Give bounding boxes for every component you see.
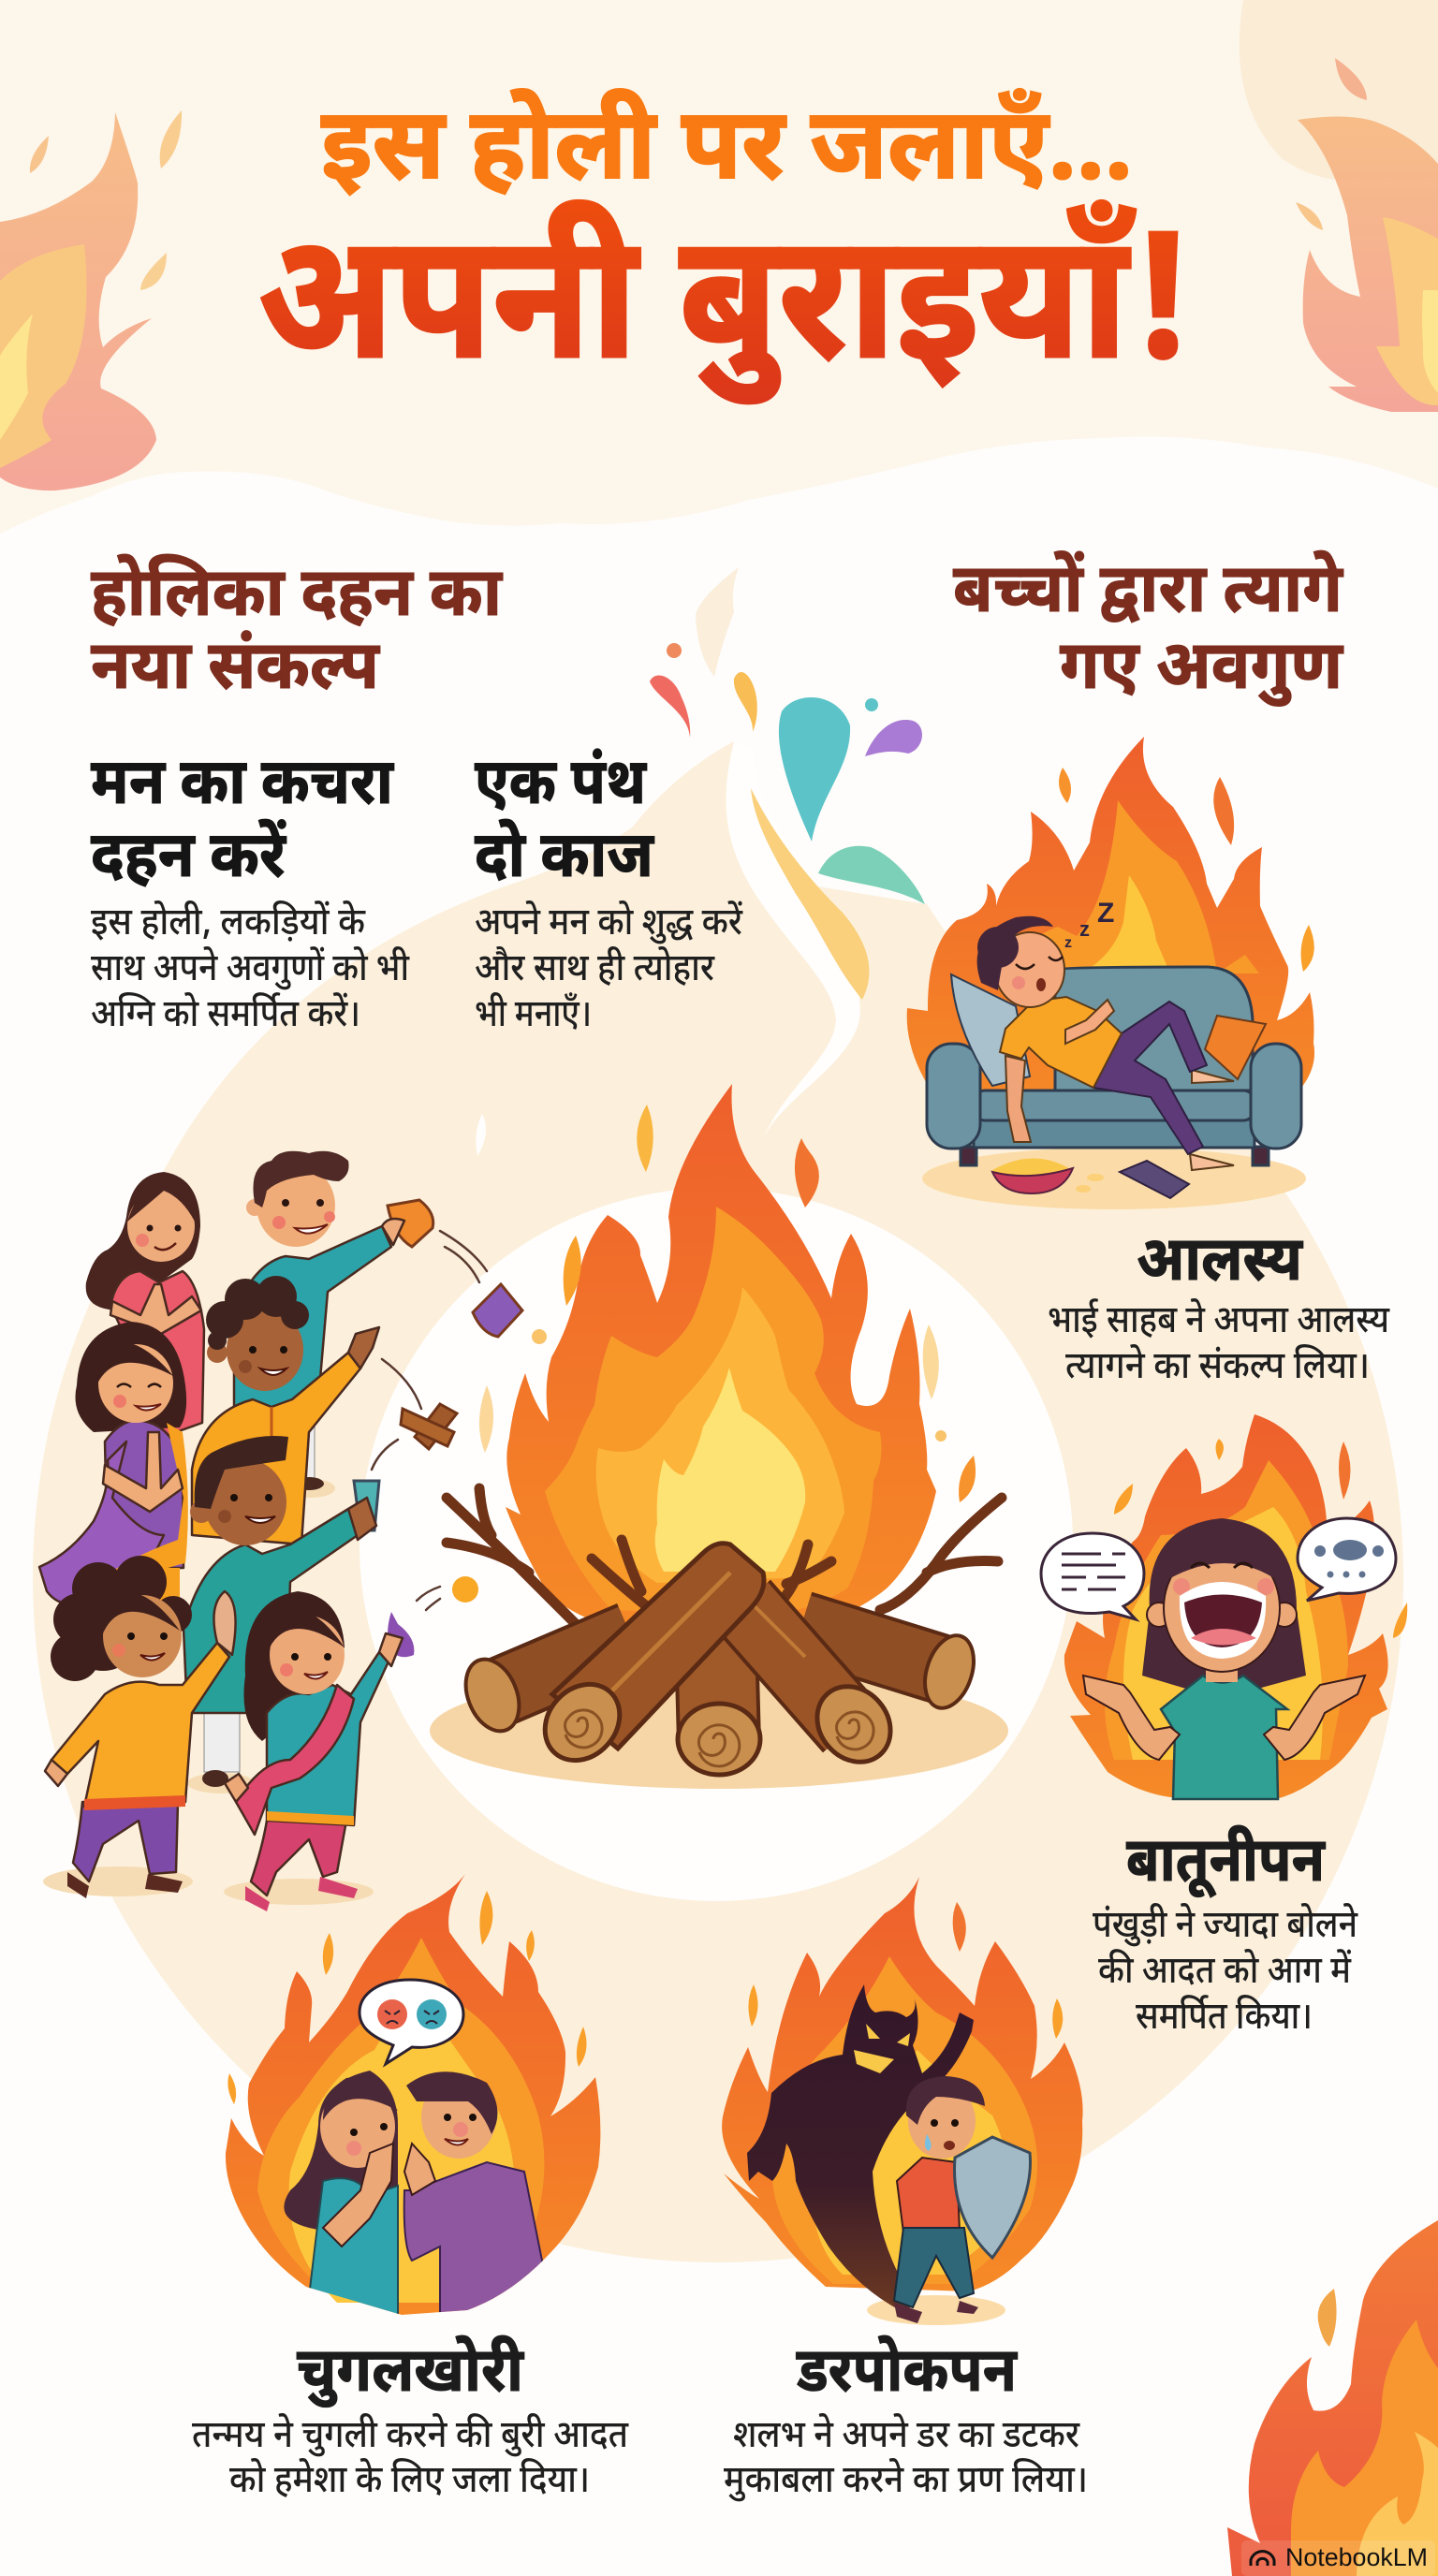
speech bubble: lines — [1041, 1533, 1144, 1619]
vignette: cowardice — [722, 1877, 1083, 2325]
corner flame: top left — [0, 110, 182, 490]
title — [257, 88, 1194, 428]
text: backbiting: को हमेशा के लिए जला दिया। — [229, 2457, 590, 2508]
corner flame: top right — [1240, 0, 1438, 412]
left heading — [91, 554, 504, 716]
log: back left — [456, 1636, 631, 1739]
left heading: नया संकल्प — [91, 628, 381, 716]
text block: two purposes: भी मनाएँ। — [475, 992, 592, 1042]
text: cowardice: डरपोकपन — [796, 2335, 1018, 2416]
text: cowardice: मुकाबला करने का प्रण लिया। — [724, 2457, 1088, 2508]
snack bowl and remote — [992, 1159, 1189, 1198]
girl with yellow kurta — [43, 1556, 236, 1898]
text block: mind waste: मन का कचरा — [91, 746, 395, 829]
log: back right — [801, 1626, 982, 1714]
right heading: गए अवगुण — [1060, 628, 1343, 716]
bonfire — [430, 1084, 1008, 1789]
text block: mind waste: दहन करें — [91, 819, 287, 902]
shadow monster — [747, 1984, 974, 2317]
girl with pink dress — [86, 1172, 204, 1442]
text block: two purposes: दो काज — [475, 819, 654, 902]
right heading: बच्चों द्वारा त्यागे — [953, 550, 1344, 639]
flame — [907, 737, 1314, 1111]
corner flame: bottom right — [1227, 2220, 1438, 2576]
boy with teal kurta — [234, 1151, 404, 1498]
right heading — [953, 550, 1344, 716]
vignette: laziness — [907, 737, 1314, 1209]
flame layers — [506, 1084, 936, 1632]
girl with teal dress — [224, 1591, 403, 1911]
text: laziness: भाई साहब ने अपना आलस्य — [1048, 1297, 1390, 1348]
zzz — [1064, 898, 1114, 951]
title: इस होली पर जलाएँ... — [321, 88, 1133, 219]
text block: two purposes — [475, 746, 743, 1042]
flame — [226, 1874, 600, 2315]
pillow — [951, 974, 1030, 1086]
whispering pair — [284, 2071, 552, 2321]
log: centre — [678, 1638, 760, 1775]
zzz: z — [1064, 935, 1072, 951]
speech bubble: quotes — [1298, 1518, 1396, 1601]
smoke swoosh — [726, 741, 869, 1135]
boy with orange kurta — [192, 1276, 379, 1544]
flame sparks — [476, 1105, 976, 1502]
text: laziness: त्यागने का संकल्प लिया। — [1065, 1343, 1370, 1394]
text block: mind waste: साथ अपने अवगुणों को भी — [91, 945, 410, 996]
text block: two purposes: अपने मन को शुद्ध करें — [475, 900, 743, 950]
flame — [722, 1877, 1083, 2291]
thrown items — [354, 1200, 522, 1657]
text block: two purposes: और साथ ही त्योहार — [475, 946, 715, 996]
text block: mind waste — [91, 746, 410, 1042]
speech bubble: angry faces — [360, 1980, 463, 2064]
text: talkativeness: पंखुड़ी ने ज्यादा बोलने — [1093, 1902, 1358, 1953]
text: talkativeness — [1093, 1825, 1358, 2044]
text: backbiting: तन्मय ने चुगली करने की बुरी आदत — [192, 2412, 629, 2463]
scared boy — [894, 2076, 985, 2323]
boy with teal kurta, dark — [183, 1436, 376, 1793]
colour splashes — [650, 643, 925, 904]
text: talkativeness: बातूनीपन — [1126, 1825, 1326, 1906]
children group — [39, 1151, 404, 1911]
log: front right — [742, 1601, 905, 1777]
monster face — [854, 2024, 910, 2073]
ground shadow — [430, 1673, 1008, 1789]
branches — [447, 1488, 1002, 1629]
sofa — [927, 967, 1301, 1165]
zzz: Z — [1097, 898, 1114, 929]
vignette: talkativeness — [1041, 1414, 1407, 1799]
girl — [1083, 1518, 1365, 1799]
text block: two purposes: एक पंथ — [475, 746, 647, 829]
left heading: होलिका दहन का — [91, 554, 504, 643]
text: cowardice — [724, 2335, 1088, 2508]
text: cowardice: शलभ ने अपने डर का डटकर — [733, 2412, 1080, 2463]
girl — [284, 2071, 398, 2321]
text: laziness: आलस्य — [1137, 1224, 1303, 1305]
text: backbiting — [192, 2335, 629, 2508]
text: talkativeness: की आदत को आग में — [1098, 1949, 1352, 1998]
log: front left — [530, 1544, 764, 1776]
orange cushion — [1205, 1016, 1266, 1079]
inner white circle — [360, 1188, 1073, 1901]
zzz: z — [1079, 917, 1090, 941]
text: laziness — [1048, 1224, 1390, 1394]
boy — [404, 2071, 552, 2321]
text block: mind waste: अग्नि को समर्पित करें। — [91, 992, 360, 1042]
vignette: backbiting — [226, 1874, 600, 2321]
sleeping boy — [977, 916, 1234, 1170]
text: backbiting: चुगलखोरी — [297, 2335, 524, 2416]
flame — [1064, 1414, 1407, 1799]
floor shadow — [922, 1148, 1306, 1209]
shield — [955, 2137, 1030, 2258]
watermark badge: NotebookLM — [1285, 2543, 1428, 2571]
title: अपनी बुराइयाँ! — [257, 200, 1194, 428]
girl with purple saree — [39, 1322, 188, 1615]
text block: mind waste: इस होली, लकड़ियों के — [91, 900, 366, 950]
text: talkativeness: समर्पित किया। — [1136, 1995, 1313, 2044]
watermark badge — [1241, 2540, 1435, 2576]
floor shadow — [867, 2295, 1005, 2325]
